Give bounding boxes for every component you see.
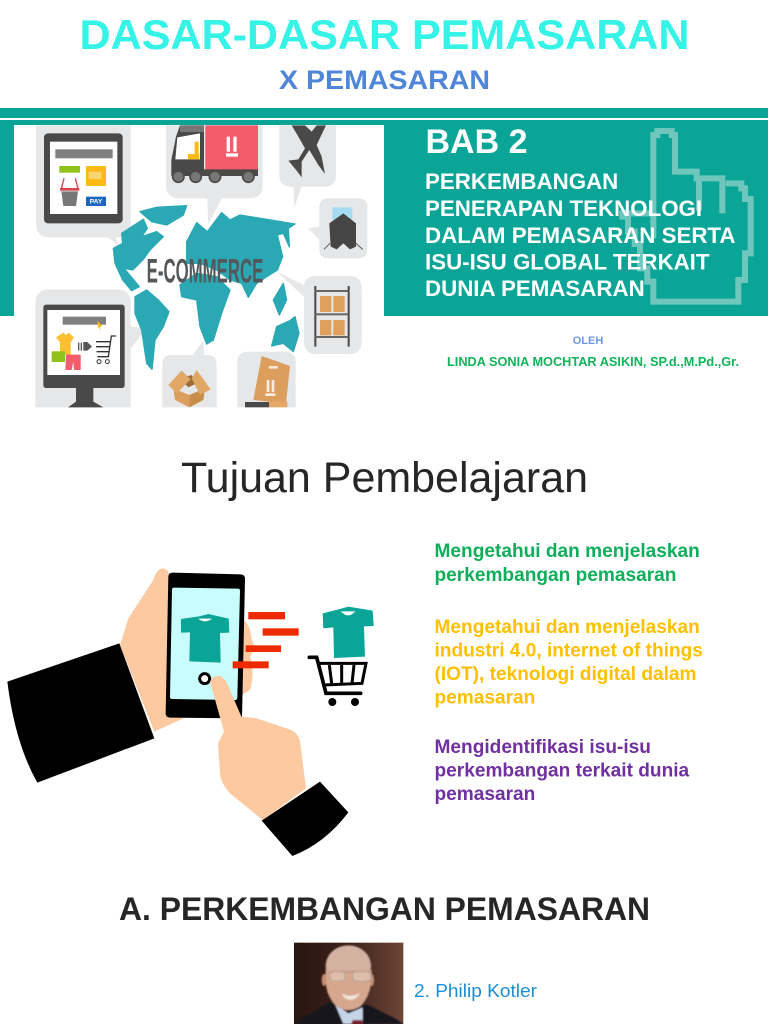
text block: chapter title: ISU-ISU GLOBAL TERKAIT — [425, 250, 710, 274]
title: DASAR-DASAR PEMASARAN — [80, 11, 690, 58]
objective 1: Mengetahui dan menjelaskan — [434, 541, 700, 562]
icon: cargo ship — [324, 207, 363, 249]
panel: e-commerce illustration — [35, 125, 367, 407]
objective 1 — [434, 541, 700, 586]
world map — [113, 206, 299, 369]
subtitle: X PEMASARAN — [279, 65, 490, 95]
icon: t-shirt over cart — [323, 607, 374, 658]
author label: OLEH — [573, 335, 603, 347]
objective 3: pemasaran — [434, 784, 535, 805]
speech bubbles — [35, 125, 367, 407]
text block: chapter title: PENERAPAN TEKNOLOGI — [425, 196, 702, 221]
caption: Philip Kotler: 2. Philip Kotler — [414, 981, 537, 1001]
objective 3: Mengidentifikasi isu-isu — [434, 737, 651, 758]
left sleeve — [7, 643, 154, 783]
icon: shopping cart — [309, 657, 366, 706]
heading: Tujuan Pembelajaran: Tujuan Pembelajaran — [181, 454, 588, 502]
icon: warehouse shelf — [314, 286, 350, 347]
illustration: hands with smartphone — [7, 568, 374, 856]
objective 2: pemasaran — [434, 688, 535, 708]
icon: pixel pointing hand — [622, 131, 751, 302]
smartphone — [166, 573, 245, 718]
icon: airplane — [288, 125, 326, 177]
text block: chapter title: DUNIA PEMASARAN — [425, 276, 645, 301]
icon: cardboard box — [168, 370, 211, 407]
text block: chapter title: PERKEMBANGAN — [425, 169, 618, 194]
photo: Philip Kotler — [294, 943, 403, 1024]
icon: shopping bag — [245, 356, 290, 407]
white mask below image edge — [0, 408, 400, 414]
header band — [0, 108, 768, 316]
objective 3: perkembangan terkait dunia — [434, 760, 690, 782]
panel: e-commerce illustration: E-COMMERCE — [147, 252, 263, 290]
objective 2: industri 4.0, internet of things — [434, 640, 703, 662]
icon: t-shirt on screen — [181, 614, 229, 663]
objective 3 — [434, 737, 690, 805]
section heading: A. PERKEMBANGAN PEMASARAN — [119, 891, 650, 927]
icon: tablet with basket — [44, 133, 123, 223]
right sleeve — [262, 782, 348, 856]
red motion bars — [233, 612, 299, 668]
objective 2: (IOT), teknologi digital dalam — [434, 664, 697, 685]
author name: LINDA SONIA MOCHTAR ASIKIN, SP.d.,M.Pd.,Gr. — [447, 354, 739, 369]
icon: tablet with basket: PAY — [90, 199, 103, 206]
objective 1: perkembangan pemasaran — [434, 565, 676, 586]
icon: delivery truck — [171, 125, 258, 182]
objective 2 — [434, 617, 703, 708]
pointing hand — [210, 676, 306, 820]
text block: chapter title — [425, 169, 736, 301]
learning objectives — [434, 541, 703, 805]
objective 2: Mengetahui dan menjelaskan — [434, 617, 700, 638]
icon: desktop shop monitor — [43, 305, 125, 407]
holding hand — [120, 568, 254, 732]
heading: BAB 2: BAB 2 — [426, 123, 528, 161]
text block: chapter title: DALAM PEMASARAN SERTA — [425, 223, 736, 248]
